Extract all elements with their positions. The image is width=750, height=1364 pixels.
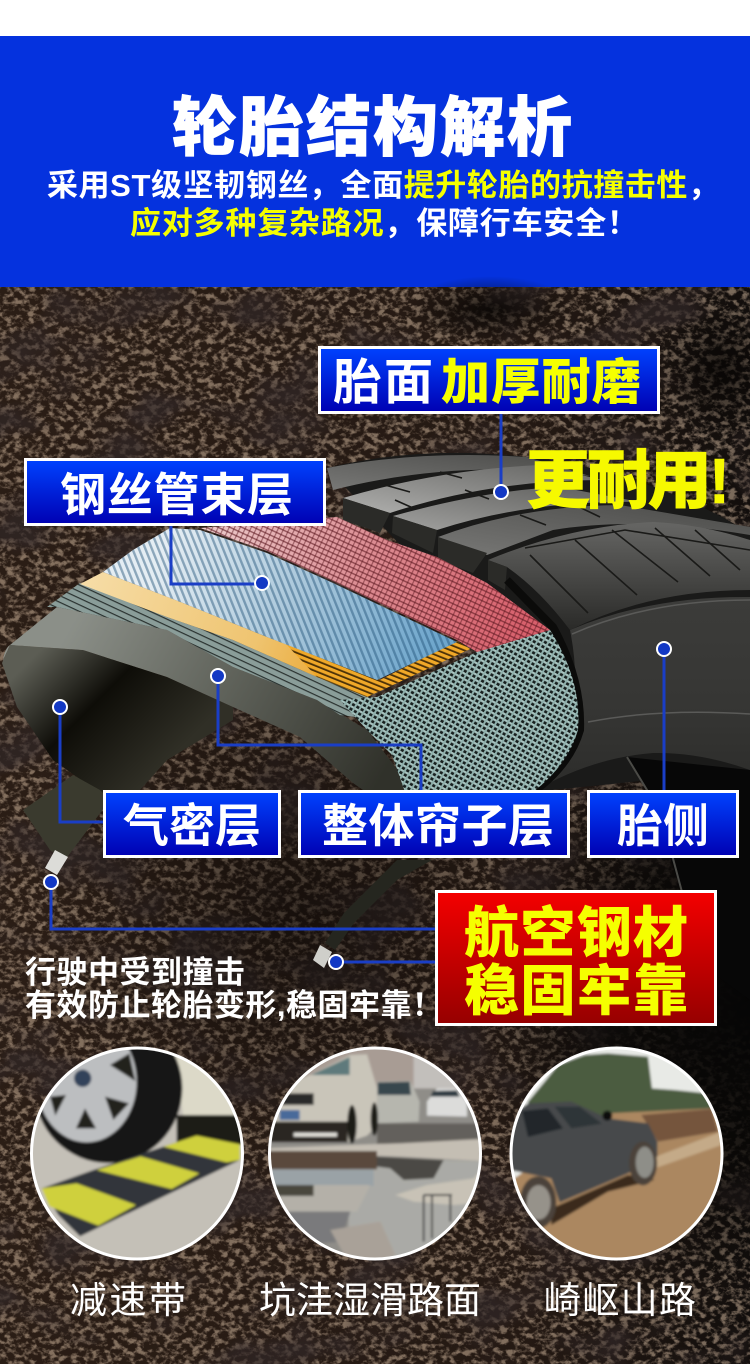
impact caption — [25, 955, 443, 1023]
caption: mountain road: 崎岖山路 — [544, 1280, 696, 1321]
rubber band — [3, 607, 410, 790]
inner liner — [2, 645, 233, 795]
photo: mountain road — [510, 1046, 724, 1260]
mid ground — [375, 1122, 478, 1144]
SUV — [505, 1102, 657, 1202]
pole reflection — [424, 1195, 452, 1242]
label: tread: 加厚耐磨 — [441, 356, 641, 410]
label: carcass ply: 整体帘子层 — [322, 800, 554, 852]
label: sidewall — [588, 792, 738, 856]
callout: aviation steel: 稳固牢靠 — [464, 960, 688, 1022]
lower flange centre — [325, 860, 432, 950]
wheel hole — [627, 757, 750, 1000]
SUV shadow — [551, 1175, 655, 1225]
caption: potholes: 坑洼湿滑路面 — [259, 1280, 481, 1321]
subtitle line 2: 应对多种复杂路况，保障行车安全！ — [130, 206, 638, 241]
callout: aviation steel — [436, 892, 716, 1024]
subtitle line 1: 采用ST级坚韧钢丝，全面提升轮胎的抗撞击性， — [47, 168, 719, 203]
centre bead — [313, 945, 332, 968]
sidewall ridges — [572, 600, 750, 722]
tyre — [39, 1050, 184, 1165]
van reflection — [264, 1151, 377, 1169]
carcass mesh layer — [340, 630, 578, 792]
cut edge — [507, 580, 580, 792]
tread ribs — [327, 455, 750, 630]
label: inner liner: 气密层 — [123, 800, 261, 852]
impact caption: 行驶中受到撞击 — [25, 955, 245, 990]
photo: potholes — [268, 1046, 482, 1260]
blue belt — [103, 528, 457, 680]
label: sidewall: 胎侧 — [617, 800, 709, 852]
white van — [264, 1054, 378, 1142]
mud ground background — [0, 276, 750, 1364]
tyre illustration — [2, 453, 750, 1000]
callout: aviation steel: 航空钢材 — [464, 902, 688, 964]
left bead — [45, 850, 68, 875]
water — [348, 1160, 478, 1256]
label: carcass ply — [300, 792, 568, 856]
right snow — [396, 1174, 477, 1206]
yellow belt — [80, 572, 470, 697]
slogan: more durable: 更耐用! — [526, 445, 730, 517]
sipes — [385, 472, 750, 613]
caption: speed bump: 减速带 — [70, 1280, 186, 1321]
title: 轮胎结构解析 — [172, 91, 572, 164]
trees — [528, 1053, 716, 1117]
header panel — [0, 36, 750, 288]
speed bump — [42, 1136, 240, 1236]
lower left flange — [23, 775, 110, 860]
photo: speed bump — [30, 1046, 244, 1260]
slush strip — [264, 1138, 493, 1162]
connector lines — [51, 414, 664, 962]
dirt road — [515, 1106, 720, 1258]
label: inner liner — [104, 792, 280, 856]
tyre body — [327, 453, 750, 792]
label: tread: 胎面 — [333, 356, 433, 410]
top white strip — [0, 0, 750, 36]
rim curve — [627, 757, 682, 892]
sidewall — [533, 597, 750, 792]
label: tread — [320, 348, 658, 412]
label: steel belt — [26, 460, 324, 524]
ply strip — [47, 583, 380, 720]
red belt — [200, 517, 550, 652]
marker dots — [44, 485, 671, 969]
cars in distance — [377, 1081, 420, 1123]
impact caption: 有效防止轮胎变形,稳固牢靠！ — [25, 988, 443, 1023]
car body — [174, 1056, 234, 1117]
block faces — [343, 498, 390, 533]
wheel rim — [41, 1050, 139, 1145]
label: steel belt: 钢丝管束层 — [60, 469, 293, 521]
